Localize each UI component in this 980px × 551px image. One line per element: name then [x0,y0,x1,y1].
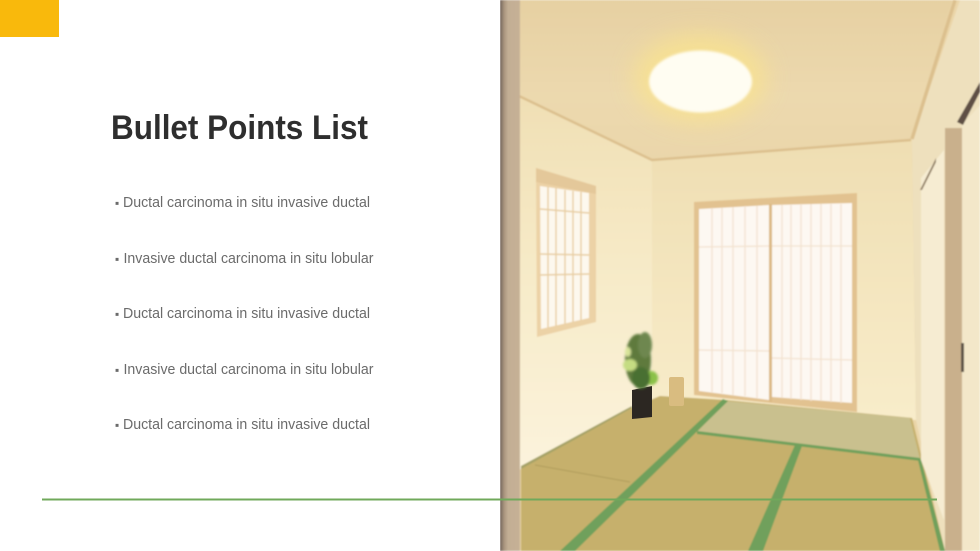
left wall [519,96,652,470]
sliding door frame [694,193,857,412]
door centre rail [769,204,772,402]
plant [623,332,658,389]
flower vase [632,386,652,419]
bullet item 1: ▪ [115,196,119,210]
sliding door right pane [772,203,852,403]
window frame [536,168,596,337]
bullet item 3: Ductal carcinoma in situ invasive ductal [123,305,370,322]
bullet list [115,194,374,433]
right wall [912,0,980,551]
mat seam [535,465,630,482]
right sliding door panel [921,150,944,520]
bullet item 3: ▪ [115,307,119,321]
bullet item 4: Invasive ductal carcinoma in situ lobular [124,361,374,378]
title: Bullet Points List [111,109,368,147]
bullet item 2: Invasive ductal carcinoma in situ lobular [124,250,374,267]
sliding door left pane [699,205,769,400]
bullet item 4: ▪ [115,363,119,377]
cornice moulding [519,0,955,160]
right door post [945,128,962,551]
window top rail [536,168,596,194]
right far panel [962,105,980,551]
door handle [961,343,964,372]
ceiling light glow [634,34,766,122]
bullet item 5: ▪ [115,418,119,432]
lighter back mat [697,401,920,459]
left door post [500,0,520,551]
photo: tatami room [500,0,980,551]
green horizontal rule [42,498,937,500]
bullet item 5: Ductal carcinoma in situ invasive ductal [123,416,370,433]
paper cylinder lamp [669,377,684,406]
door lattice [699,204,852,403]
ceiling light [649,50,752,112]
yellow corner accent [0,0,59,37]
bullet item 1: Ductal carcinoma in situ invasive ductal [123,194,370,211]
window pane [540,186,589,329]
background panel [0,0,500,551]
back wall [652,140,916,420]
tatami floor [521,396,945,551]
window lattice [540,187,589,328]
bullet item 2: ▪ [115,252,119,266]
dark door rail [957,82,980,125]
green mat borders [521,399,945,551]
ceiling [519,0,952,160]
